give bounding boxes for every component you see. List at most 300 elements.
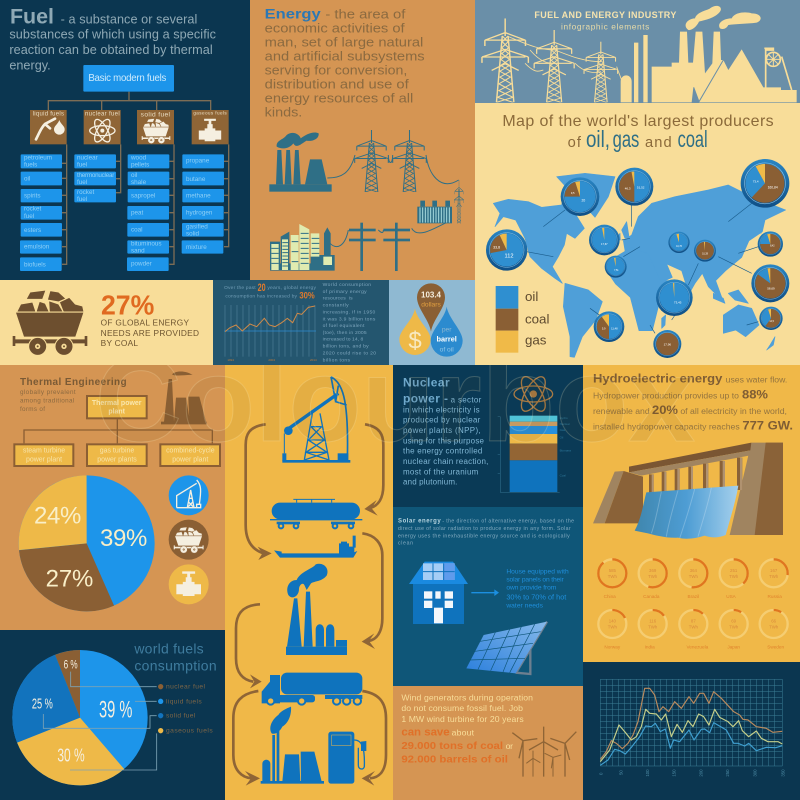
thermal tree connectors xyxy=(24,419,212,443)
chart side text: resources is xyxy=(323,296,353,302)
icon: brown price drop xyxy=(417,283,445,332)
heading: world fuels consumption: consumption xyxy=(134,658,217,674)
box: combined-cycle power plant: combined-cycle xyxy=(166,448,215,455)
donut: Brazil: 364 xyxy=(690,568,698,573)
list: liquid fuels: oil xyxy=(24,175,30,182)
energy definition text: energy resources of all xyxy=(265,90,413,105)
pie: UK xyxy=(589,225,620,255)
list: gaseous fuels: hydrogen xyxy=(186,210,213,217)
hydro text xyxy=(593,372,793,432)
icon: oil pump badge xyxy=(169,475,209,515)
donut: China: 585 xyxy=(609,568,617,573)
panel: nuclear power xyxy=(393,365,583,508)
hydro text: Hydroelectric energy xyxy=(593,372,723,386)
solar text: direct use of solar radiation to produce energy in any form. Solar xyxy=(398,526,571,532)
donut: Norway xyxy=(598,610,626,650)
icon: power plant and petrol pump xyxy=(261,707,366,784)
donut: Japan xyxy=(720,610,748,650)
donut: China: China xyxy=(604,594,616,599)
chart side text: of primary energy xyxy=(323,289,367,295)
energy definition text: serving for conversion, xyxy=(265,62,407,77)
donut: India: 116 xyxy=(649,619,657,624)
energy definition text: and artificial subsystems xyxy=(265,48,425,63)
icon: blue drop: per xyxy=(442,327,452,334)
solar text: Solar energy xyxy=(398,519,441,525)
pie: Brazil: 11,48 xyxy=(611,326,618,330)
pie chart: thermal: 27% xyxy=(46,566,93,593)
stacked bar chart: Coal xyxy=(560,474,566,478)
nuclear text: power - xyxy=(403,392,448,406)
wind text: or xyxy=(506,741,513,751)
box: thermal power plant: Thermal power xyxy=(92,400,142,407)
box: thermal power plant: plant xyxy=(108,408,126,415)
donut: India: India xyxy=(645,645,655,650)
chart side text: increasing. If in 1950 xyxy=(323,309,376,315)
stacked bar chart: Biomass xyxy=(560,449,572,453)
list: solid fuels: sapropel xyxy=(131,192,155,199)
pie: Russia xyxy=(741,159,789,208)
arrows between steps xyxy=(233,424,386,778)
box: basic modern fuels: Basic modern fuels xyxy=(88,73,167,84)
list: gaseous fuels: gasified xyxy=(186,223,208,230)
donut: Brazil: Brazil xyxy=(688,594,699,599)
stacked bar chart: Nuclear xyxy=(560,422,570,426)
solar house text: solar panels on their xyxy=(506,577,564,584)
line chart: 2014 xyxy=(310,358,317,362)
map title: oil, xyxy=(586,126,610,152)
chart axis labels: 100 xyxy=(645,769,650,777)
list: nuclear fuels: fuel xyxy=(77,179,87,186)
donut: Canada: 369 xyxy=(649,568,657,573)
donut: Venezuela xyxy=(679,610,709,650)
legend: coal xyxy=(525,311,549,326)
icon: blue drop: of oil xyxy=(440,346,454,353)
icon: rail tank car xyxy=(270,499,362,529)
icon: blue drop xyxy=(431,307,463,357)
box: combined-cycle power plant xyxy=(160,444,220,466)
chart heading: years, global energy xyxy=(267,285,316,291)
watermark: Colourbox xyxy=(95,333,695,467)
list: liquid fuels: fuel xyxy=(24,213,34,220)
energy definition text: - the area of xyxy=(325,6,406,21)
nuclear text: in which electricity is xyxy=(403,405,480,414)
wind text: do not consume fossil fuel. Job xyxy=(401,703,523,713)
donut: Japan: TWh xyxy=(729,625,739,630)
chart axis labels: 200 xyxy=(698,769,703,777)
stacked bar chart: Hydro xyxy=(560,416,568,420)
pie: India xyxy=(694,240,716,262)
list: gaseous fuels xyxy=(182,154,224,254)
heading: Fuel: Fuel xyxy=(10,4,54,28)
donut: China: TWh xyxy=(608,574,617,579)
icon: coal wagon xyxy=(13,290,87,355)
icon: dam xyxy=(593,443,783,539)
wind text: about xyxy=(452,727,475,737)
header title: FUEL AND ENERGY INDUSTRY xyxy=(534,10,676,20)
pie labels: 25 % xyxy=(32,696,53,712)
chart axis labels: 250 xyxy=(725,769,730,777)
hydro text: installed hydropower capacity reaches xyxy=(593,422,740,431)
nuclear text xyxy=(403,376,488,487)
heading: Fuel: substances of which using a specific xyxy=(9,28,216,42)
chart heading: Over the past xyxy=(224,285,256,291)
pie: India: 10,28 xyxy=(702,253,709,255)
arrow: house to text xyxy=(471,589,499,596)
energy definition text: kinds. xyxy=(265,104,302,119)
pie legend: liquid fuels xyxy=(166,698,202,705)
energy definition text: man, set of large natural xyxy=(265,34,423,49)
hydro text: uses water flow. xyxy=(726,376,787,385)
icon: fuel truck xyxy=(262,673,362,706)
donut: India: TWh xyxy=(648,625,658,630)
pie: South Africa xyxy=(653,330,681,358)
icon: brown price drop: dollars xyxy=(421,302,441,309)
donut: Brazil xyxy=(679,559,707,599)
pie: Korea xyxy=(758,231,783,257)
pie: Canada: 9,5 xyxy=(571,191,575,195)
wind text: 1 MW wind turbine for 20 years xyxy=(401,714,524,724)
list: liquid fuels: fuels xyxy=(24,162,37,169)
pie: Brazil: 5,9 xyxy=(602,326,606,330)
map title: coal xyxy=(678,126,708,152)
pie labels: 39 % xyxy=(99,697,132,724)
category: gaseous fuels xyxy=(192,110,229,144)
list: solid fuels: powder xyxy=(131,261,152,268)
map title xyxy=(502,113,774,152)
box: gas turbine power plants: power plants xyxy=(97,457,137,464)
list: nuclear fuels xyxy=(74,154,116,203)
list: liquid fuels: biofuels xyxy=(24,261,46,268)
donut: Russia: 167 xyxy=(770,568,778,573)
donut: Japan: 69 xyxy=(731,619,737,624)
chart side text: constantly xyxy=(323,303,349,309)
box: gas turbine power plants: gas turbine xyxy=(100,448,134,455)
chart grid xyxy=(600,679,782,766)
stat: 27 percent: 27% xyxy=(101,290,154,321)
header title: infographic elements xyxy=(561,22,649,32)
list: solid fuels: peat xyxy=(131,210,144,217)
chart axis labels: 300 xyxy=(752,769,757,777)
list: solid fuels: wood xyxy=(130,154,147,161)
energy definition text: economic activities of xyxy=(265,20,405,35)
category: solid fuel xyxy=(137,110,174,144)
stat: 27 percent: BY COAL xyxy=(101,338,138,348)
category: liquid fuels: liquid fuels xyxy=(33,112,64,118)
list: gaseous fuels: mixture xyxy=(186,244,207,251)
heading: world fuels consumption xyxy=(133,640,217,674)
pie chart: world fuels xyxy=(12,650,148,785)
list: liquid fuels: emulsion xyxy=(24,244,50,251)
pie labels: 30 % xyxy=(57,745,85,766)
nuclear text: a sector xyxy=(451,396,482,405)
pie: Australia: 14,5 xyxy=(769,321,775,323)
icon: tanker ship xyxy=(274,536,357,558)
panel: coal share strip xyxy=(0,280,213,365)
map title: gas xyxy=(613,126,639,152)
icon: atom xyxy=(514,373,553,415)
pie: UK: 17,67 xyxy=(601,242,608,246)
donut: Russia: TWh xyxy=(769,574,779,579)
solar house text: 30% to 70% of hot xyxy=(506,592,566,601)
list: nuclear fuels: fuel xyxy=(77,162,87,169)
pie: Norway: 51,52 xyxy=(637,186,645,190)
pie legend: solid fuel xyxy=(166,712,196,719)
hydro text: of all electricity in the world, xyxy=(680,407,787,416)
chart heading: 30% xyxy=(299,291,315,301)
icon: pylons xyxy=(355,130,464,223)
list: nuclear fuels: thermonuclear xyxy=(77,172,114,179)
category: solid fuel: solid fuel xyxy=(141,111,171,118)
donut: Brazil: TWh xyxy=(689,574,698,579)
energy definition text: Energy xyxy=(265,6,321,21)
thermal heading: forms of xyxy=(20,406,45,413)
wind text: 29.000 tons of coal xyxy=(401,741,503,752)
list: nuclear fuels: fuel xyxy=(77,196,87,203)
donut: USA xyxy=(720,559,748,599)
chart side text: 2020 could rise to 20 xyxy=(323,350,376,356)
wind text: Wind generators during operation xyxy=(401,693,533,703)
energy definition text: distribution and use of xyxy=(265,76,409,91)
donut: Norway: 140 xyxy=(609,619,617,624)
chart axis labels: 150 xyxy=(672,769,677,777)
pie: USA xyxy=(486,229,527,271)
world map xyxy=(493,173,786,357)
heading: world fuels consumption: world fuels xyxy=(133,640,204,656)
nuclear text: Nuclear xyxy=(403,376,450,390)
hydro text: 88% xyxy=(742,387,768,401)
list: liquid fuels: rocket xyxy=(24,206,41,213)
list: liquid fuels: petroleum xyxy=(24,155,52,162)
wind text: 92.000 barrels of oil xyxy=(401,754,508,765)
pie: Norway: 46,3 xyxy=(625,186,631,190)
box: thermal power plant xyxy=(87,396,147,418)
pie: Russia: 73,4 xyxy=(753,179,759,183)
panel: fuel supply flow xyxy=(225,365,393,800)
donut: Norway: TWh xyxy=(608,625,617,630)
donut: Canada: TWh xyxy=(648,574,658,579)
icon: coal wagon badge xyxy=(169,520,209,560)
icon: power lines xyxy=(327,155,459,247)
panel: solar energy xyxy=(393,507,583,686)
icon: wind turbines xyxy=(512,727,576,777)
pie labels xyxy=(32,657,132,766)
solar house text xyxy=(505,569,569,609)
icon: mine headframe xyxy=(764,48,792,90)
donut: Sweden xyxy=(760,610,788,650)
donut: India xyxy=(639,610,667,650)
hydro text: Hydropower production provides up to xyxy=(593,391,740,400)
donut: Sweden: Sweden xyxy=(767,645,784,650)
nuclear text: nuclear chain reaction, xyxy=(403,457,488,466)
donut: Russia xyxy=(760,559,788,599)
icon: solar panel xyxy=(466,622,547,674)
pie: Brazil xyxy=(594,311,624,342)
wind text: can save xyxy=(401,726,450,738)
chart axis labels xyxy=(598,769,785,777)
donut: Sweden: TWh xyxy=(769,625,779,630)
chart axis labels: 50 xyxy=(618,770,623,775)
list: solid fuels xyxy=(127,154,169,271)
list: gaseous fuels: methane xyxy=(186,192,211,199)
solar house text: House equipped with xyxy=(506,569,569,576)
donut: Venezuela: 87 xyxy=(691,619,696,624)
hydro text: 20% xyxy=(652,403,678,417)
donut: Venezuela: Venezuela xyxy=(686,645,709,650)
pie: USA: 112 xyxy=(504,253,514,259)
solar text xyxy=(398,519,574,546)
thermal heading: among traditional xyxy=(20,397,74,404)
pie legend: nuclear fuel xyxy=(166,684,206,691)
list: nuclear fuels: rocket xyxy=(77,189,94,196)
pie: Canada: 20 xyxy=(581,198,585,202)
header title xyxy=(534,10,676,32)
box: steam turbine power plant: steam turbine xyxy=(23,448,65,455)
pie leader lines xyxy=(43,672,157,770)
list: solid fuels: oil xyxy=(131,172,137,179)
pie: Iran xyxy=(668,232,690,253)
donut: Japan: Japan xyxy=(727,645,740,650)
icon: yellow dollar drop: $ xyxy=(408,328,422,355)
solar house text: own provide from xyxy=(506,585,557,592)
list: gaseous fuels: solid xyxy=(186,231,199,238)
heading: Fuel: reaction can be obtained by thermal xyxy=(9,43,213,57)
chart side text: billion tons, and by xyxy=(323,344,369,350)
stacked bar chart: Gas xyxy=(560,428,566,432)
list: solid fuels: sand xyxy=(131,248,145,255)
list: solid fuels: shale xyxy=(131,179,147,186)
chart side text: billion tons xyxy=(323,357,351,363)
list: liquid fuels: esters xyxy=(24,227,41,234)
pie: Russia: 160,84 xyxy=(768,186,778,190)
pie: China: 58,69 xyxy=(767,286,775,290)
line chart: 1994 xyxy=(227,358,234,362)
pie: South Africa: 17,96 xyxy=(664,342,671,346)
heading: Fuel: - a substance or several xyxy=(61,12,197,26)
stacked bar chart: Oil xyxy=(560,435,564,439)
wind text xyxy=(401,693,533,765)
heading: Fuel: energy. xyxy=(9,58,51,72)
list: solid fuels: pellets xyxy=(131,162,149,169)
category: nuclear fuel xyxy=(84,110,121,144)
legend xyxy=(496,286,549,353)
list: solid fuels: coal xyxy=(131,227,143,234)
chart side text: (toe), then in 2005 xyxy=(323,330,367,336)
thermal heading: Thermal Engineering xyxy=(20,377,127,388)
nuclear text: most of the uranium xyxy=(403,467,479,476)
donut: China xyxy=(598,559,626,599)
pie chart: thermal xyxy=(19,475,155,611)
category: liquid fuels xyxy=(30,110,67,144)
chart heading: 20 xyxy=(258,282,266,294)
chart axis labels: 350 xyxy=(780,769,785,777)
list: liquid fuels xyxy=(20,154,62,271)
pie: Saudi Arabia xyxy=(656,279,693,316)
stat: 27 percent: NEEDS ARE PROVIDED xyxy=(101,328,199,338)
heading: Fuel xyxy=(9,4,216,72)
chart side text: it was 3.9 billion tons xyxy=(323,316,376,322)
icon: city xyxy=(270,224,335,271)
solar text: clean xyxy=(398,540,413,546)
chart side text: of fuel equivalent xyxy=(323,323,365,329)
pie: Australia xyxy=(759,307,783,330)
panel: wind energy xyxy=(393,686,583,800)
arrowheads xyxy=(245,500,378,786)
donut: USA: 251 xyxy=(730,568,738,573)
pie: Saudi Arabia: 73,45 xyxy=(674,300,682,304)
donut: Sweden: 66 xyxy=(771,619,777,624)
nuclear text: power plants (NPP), xyxy=(403,426,481,435)
icon: solar house xyxy=(409,562,468,624)
panel: multi-line chart xyxy=(583,662,800,800)
pie: Norway xyxy=(615,168,653,206)
legend: gas xyxy=(525,332,547,347)
map title: Map of the world's largest producers xyxy=(502,113,774,130)
panel: thermal engineering xyxy=(0,365,225,630)
category: gaseous fuels: gaseous fuels xyxy=(193,111,227,116)
fuel tree connectors xyxy=(48,92,229,264)
chart heading: consumption has increased by xyxy=(225,293,297,299)
icon: utility poles xyxy=(349,223,410,271)
pie: China xyxy=(751,264,789,302)
pie: Algeria: 7,51 xyxy=(614,270,619,272)
pie legend: gaseous fuels xyxy=(166,728,213,735)
panel: fuel definition and fuel tree xyxy=(0,0,250,280)
box: combined-cycle power plant: power plant xyxy=(172,457,208,464)
donut: USA: USA xyxy=(726,594,737,599)
pie chart: thermal: 24% xyxy=(34,502,81,529)
category: nuclear fuel: nuclear fuel xyxy=(85,112,120,118)
donut: Norway: Norway xyxy=(604,645,621,650)
solar text: - the direction of alternative energy, based on the xyxy=(442,519,574,525)
box: steam turbine power plant xyxy=(14,444,73,466)
pie: USA: 33,8 xyxy=(493,245,500,249)
list: solid fuels: bituminous xyxy=(131,240,162,247)
pie labels: 6 % xyxy=(64,657,78,671)
chart side text: increased to 14, 8 xyxy=(323,337,364,343)
chart side text xyxy=(323,282,376,363)
icon: transformer xyxy=(417,201,452,223)
map title: of xyxy=(568,135,582,151)
pie legend xyxy=(158,684,213,735)
legend: oil xyxy=(525,289,538,304)
panel: world map of producers xyxy=(475,103,800,365)
chart heading xyxy=(224,282,316,301)
pie: Iran: 10,76 xyxy=(676,246,683,248)
solar house text: water needs xyxy=(505,602,544,609)
donut: USA: TWh xyxy=(729,574,739,579)
panel: energy consumption chart xyxy=(213,280,389,365)
list: nuclear fuels: nuclear xyxy=(77,154,98,161)
donut: Russia: Russia xyxy=(768,594,782,599)
icon: power plant xyxy=(269,133,332,192)
list: gaseous fuels: propane xyxy=(186,158,210,165)
icon: transmission towers xyxy=(482,18,623,102)
line chart xyxy=(224,305,317,362)
icon: blue drop: barrel xyxy=(436,335,457,344)
icon: thermal plant xyxy=(161,372,207,424)
list: gaseous fuels: butane xyxy=(186,176,206,183)
panel: oil price xyxy=(389,280,475,365)
thermal heading: globally prevalent xyxy=(20,389,76,396)
icon: refinery xyxy=(286,564,347,655)
icon: valve badge xyxy=(169,564,209,604)
pie: Algeria xyxy=(605,256,627,278)
icon: brown price drop: 103.4 xyxy=(421,290,442,299)
panel: hydroelectric energy xyxy=(583,365,800,662)
nuclear text: the energy controlled xyxy=(403,447,482,456)
panel: energy xyxy=(250,0,475,280)
energy definition text xyxy=(265,6,425,119)
